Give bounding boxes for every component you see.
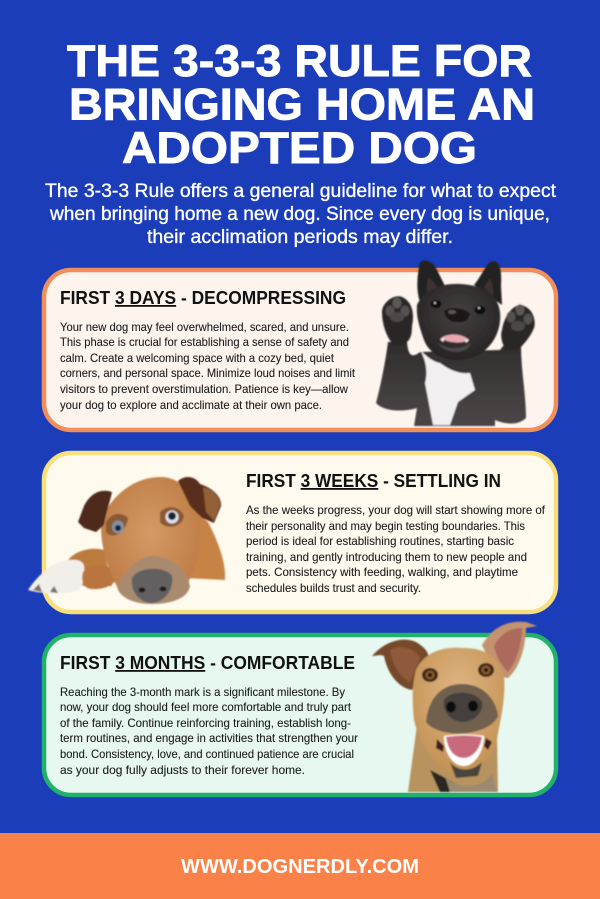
icon: sad brown dog lying down <box>28 477 225 604</box>
heading: first 3 months: FIRST 3 MONTHS - COMFORTABLE <box>60 653 355 673</box>
icon: black french bulldog with raised paws <box>376 260 535 426</box>
body text: first 3 months <box>60 686 358 777</box>
footer website url: WWW.DOGNERDLY.COM <box>181 856 419 878</box>
body text: first 3 weeks: their personality and may begin testing boundaries. This <box>246 520 525 533</box>
title <box>67 37 535 173</box>
footer bar <box>0 833 600 899</box>
body text: first 3 weeks: schedules builds trust and security. <box>246 582 421 595</box>
icon: happy tan dog with big ears <box>372 622 537 792</box>
title: ADOPTED DOG <box>122 124 477 173</box>
body text: first 3 days: calm. Create a welcoming space with a cozy bed, quiet <box>60 352 335 365</box>
subtitle text block: The 3-3-3 Rule offers a general guideline for what to expect <box>45 181 557 202</box>
panel background: orange card <box>44 270 556 430</box>
body text: first 3 days: visitors to prevent overstimulation. Patience is key—allow <box>60 383 349 396</box>
body text: first 3 weeks: period is ideal for establishing routines, starting basic <box>246 535 514 548</box>
body text: first 3 weeks: pets. Consistency with feeding, walking, and playtime <box>246 566 518 579</box>
body text: first 3 months: Reaching the 3-month mark is a significant milestone. By <box>60 686 345 699</box>
heading: first 3 days: FIRST 3 DAYS - DECOMPRESSING <box>60 288 346 308</box>
panel: first 3 weeks <box>28 453 556 612</box>
body text: first 3 weeks: training, and gently introducing them to new people and <box>246 551 527 564</box>
panel: first 3 months <box>44 622 556 795</box>
body text: first 3 days: This phase is crucial for establishing a sense of safety and <box>60 336 349 349</box>
body text: first 3 months: now, your dog should feel more comfortable and truly part <box>60 701 352 714</box>
panel background: green card <box>44 635 556 795</box>
panel background: yellow card <box>44 453 556 612</box>
body text: first 3 days: Your new dog may feel overwhelmed, scared, and unsure. <box>60 321 349 334</box>
body text: first 3 months: as your dog fully adjusts to their forever home. <box>60 764 305 777</box>
body text: first 3 days <box>60 321 356 412</box>
panel: first 3 days <box>44 260 556 430</box>
body text: first 3 days: your dog to explore and acclimate at their own pace. <box>60 399 322 412</box>
subtitle text block: when bringing home a new dog. Since every dog is unique, <box>49 204 550 225</box>
body text: first 3 months: term routines, and engage in activities that strengthen your <box>60 732 358 745</box>
subtitle text block: their acclimation periods may differ. <box>147 227 453 248</box>
body text: first 3 months: of the family. Continue reinforcing training, establish long- <box>60 717 351 730</box>
title: BRINGING HOME AN <box>69 80 535 130</box>
body text: first 3 months: bond. Consistency, love, and continued patience are crucial <box>60 748 354 761</box>
body text: first 3 weeks: As the weeks progress, your dog will start showing more of <box>246 504 546 517</box>
subtitle text block <box>45 181 557 248</box>
body text: first 3 days: corners, and personal space. Minimize loud noises and limit <box>60 367 356 380</box>
heading: first 3 weeks: FIRST 3 WEEKS - SETTLING IN <box>246 471 501 491</box>
body text: first 3 weeks <box>246 504 546 595</box>
title: THE 3-3-3 RULE FOR <box>67 37 532 86</box>
